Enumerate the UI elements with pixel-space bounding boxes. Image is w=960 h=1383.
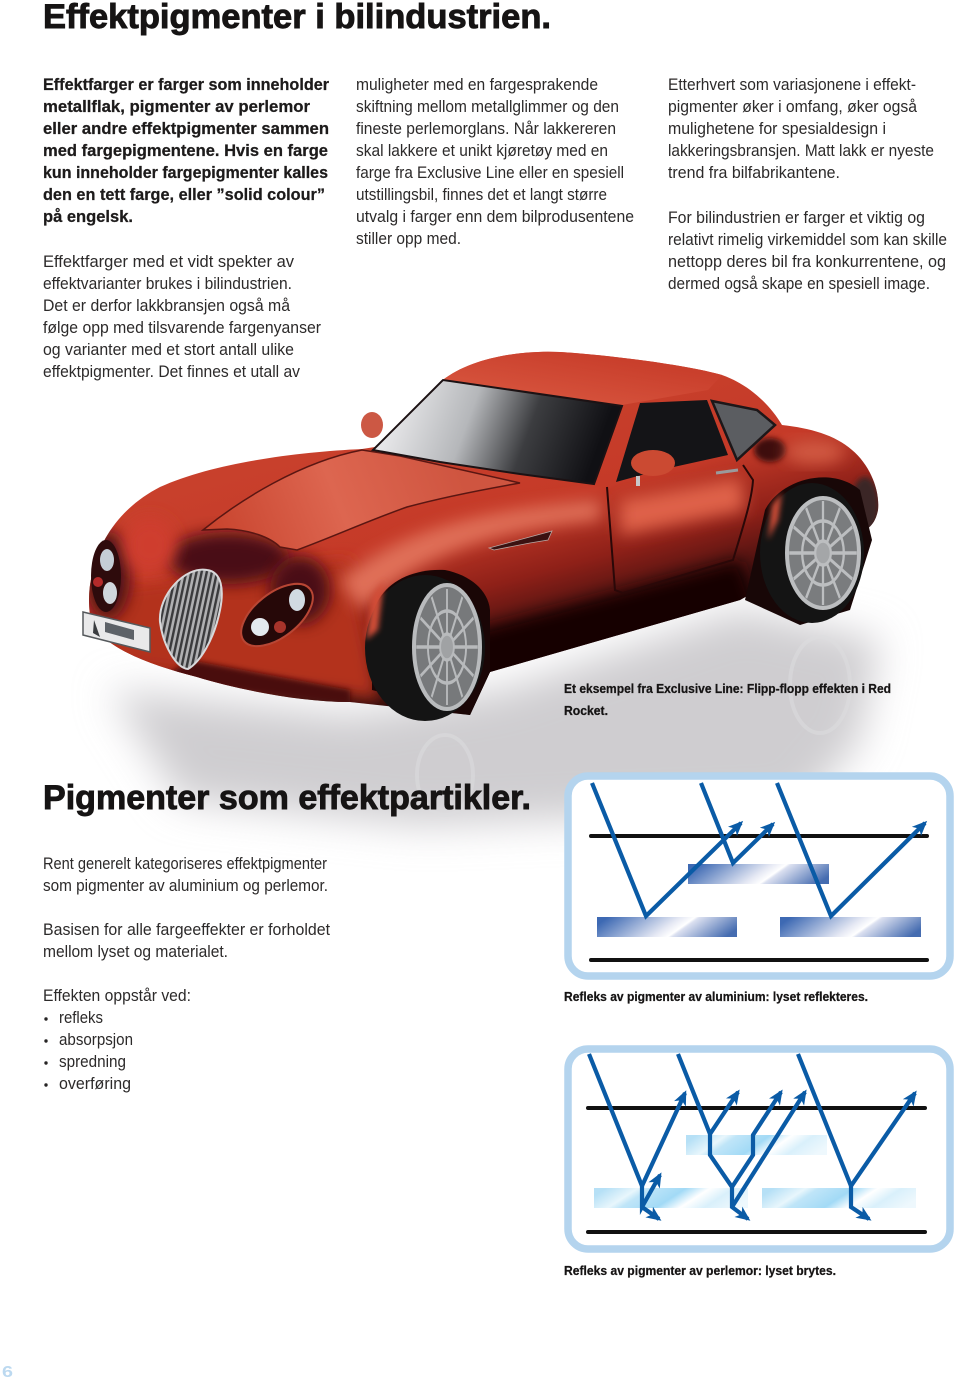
bullet list: spredning bbox=[59, 1053, 126, 1071]
section body text bbox=[43, 855, 330, 961]
bullet list: overføring bbox=[59, 1075, 131, 1093]
text column 3: nettopp deres bil fra konkurrentene, og bbox=[668, 253, 946, 271]
left headlights bbox=[91, 540, 121, 612]
page number: 6 bbox=[2, 1364, 13, 1381]
text column 3: lakkeringsbransjen. Matt lakk er nyeste bbox=[668, 142, 934, 160]
section body text: som pigmenter av aluminium og perlemor. bbox=[43, 877, 328, 895]
text column 2: utstillingsbil, finnes det et langt større bbox=[356, 186, 607, 204]
diagram: pearl reflection bbox=[568, 1049, 950, 1249]
front wheel bbox=[365, 570, 490, 721]
intro bold text: metallflak, pigmenter av perlemor bbox=[43, 98, 311, 116]
section body text: Basisen for alle fargeeffekter er forholdet bbox=[43, 921, 330, 939]
intro bold text bbox=[43, 76, 330, 226]
ground shadow bbox=[110, 610, 880, 825]
text column 2: fineste perlemorglans. Når lakkereren bbox=[356, 120, 616, 138]
windshield bbox=[373, 380, 622, 484]
left mirror bbox=[361, 412, 383, 438]
intro bold text: eller andre effektpigmenter sammen bbox=[43, 120, 329, 138]
text column 3: mulighetene for spesialdesign i bbox=[668, 120, 886, 138]
license plate bbox=[83, 612, 150, 652]
diagram: aluminium reflection bbox=[568, 776, 950, 976]
section heading: Pigmenter som effektpartikler. bbox=[43, 779, 531, 817]
intro bold text: den en tett farge, eller ”solid colour” bbox=[43, 186, 325, 204]
text column 2: skiftning mellom metallglimmer og den bbox=[356, 98, 619, 116]
side vent bbox=[489, 531, 552, 550]
car photograph bbox=[83, 352, 880, 825]
diagram caption: aluminium: Refleks av pigmenter av aluminium: lyset reflekteres. bbox=[564, 990, 868, 1004]
text column 3: trend fra bilfabrikantene. bbox=[668, 164, 840, 182]
light rays bbox=[589, 1054, 915, 1219]
pigment flakes bbox=[597, 864, 921, 937]
side window bbox=[616, 400, 728, 482]
intro bold text: kun inneholder fargepigmenter kalles bbox=[43, 164, 328, 182]
panel frame bbox=[568, 1049, 950, 1249]
text column 3: dermed også skape en spesiell image. bbox=[668, 275, 930, 293]
text column 2 bbox=[356, 76, 634, 248]
section body text: Rent generelt kategoriseres effektpigmenter bbox=[43, 855, 327, 873]
body text: Det er derfor lakkbransjen også må bbox=[43, 297, 291, 315]
body text bbox=[43, 253, 321, 381]
bullet list: refleks bbox=[59, 1009, 103, 1027]
door handle bbox=[716, 470, 738, 473]
diagram caption: pearl: Refleks av pigmenter av perlemor: lyset brytes. bbox=[564, 1264, 836, 1278]
intro bold text: på engelsk. bbox=[43, 208, 133, 226]
bullet list bbox=[43, 987, 191, 1093]
bullet list: absorpsjon bbox=[59, 1031, 133, 1049]
body text: effektvarianter brukes i bilindustrien. bbox=[43, 275, 292, 293]
hood bbox=[203, 450, 520, 550]
text column 2: muligheter med en fargesprakende bbox=[356, 76, 598, 94]
panel frame bbox=[568, 776, 950, 976]
body text: effektpigmenter. Det finnes et utall av bbox=[43, 363, 301, 381]
grille bbox=[160, 570, 222, 669]
text column 3: Etterhvert som variasjonene i effekt- bbox=[668, 76, 916, 94]
wheel arch highlights bbox=[366, 492, 782, 640]
rear quarter window bbox=[712, 401, 775, 460]
text column 3: For bilindustrien er farger et viktig og bbox=[668, 209, 925, 227]
light rays bbox=[592, 783, 925, 916]
text column 3 bbox=[668, 76, 947, 293]
rear wheel bbox=[745, 477, 872, 625]
car caption: Et eksempel fra Exclusive Line: Flipp-flopp effekten i Red bbox=[564, 682, 891, 696]
car caption: Rocket. bbox=[564, 704, 608, 718]
body text: Effektfarger med et vidt spekter av bbox=[43, 253, 295, 271]
body shading bbox=[86, 438, 879, 720]
car caption bbox=[564, 682, 891, 718]
door outline bbox=[607, 465, 753, 593]
text column 2: farge fra Exclusive Line eller en spesiell bbox=[356, 164, 624, 182]
text column 2: skal lakkere et unikt kjøretøy med en bbox=[356, 142, 608, 160]
intro bold text: med fargepigmentene. Hvis en farge bbox=[43, 142, 328, 160]
pigment flakes bbox=[594, 1135, 916, 1208]
door mirror bbox=[631, 450, 675, 486]
text column 3: pigmenter øker i omfang, øker også bbox=[668, 98, 918, 116]
bullet list: Effekten oppstår ved: bbox=[43, 987, 191, 1005]
car body bbox=[89, 352, 878, 715]
text column 1 bbox=[43, 76, 330, 381]
body text: og varianter med et stort antall ulike bbox=[43, 341, 294, 359]
intro bold text: Effektfarger er farger som inneholder bbox=[43, 76, 330, 94]
surface lines bbox=[588, 1108, 925, 1232]
text column 3: relativt rimelig virkemiddel som kan skille bbox=[668, 231, 947, 249]
surface lines bbox=[591, 836, 927, 960]
text column 2: utvalg i farger enn dem bilprodusentene bbox=[356, 208, 634, 226]
body text: følge opp med tilsvarende fargenyanser bbox=[43, 319, 321, 337]
section body text: mellom lyset og materialet. bbox=[43, 943, 228, 961]
wheel reflections bbox=[417, 637, 850, 815]
right headlights bbox=[230, 572, 324, 658]
text column 2: stiller opp med. bbox=[356, 230, 461, 248]
roof bbox=[443, 352, 722, 405]
